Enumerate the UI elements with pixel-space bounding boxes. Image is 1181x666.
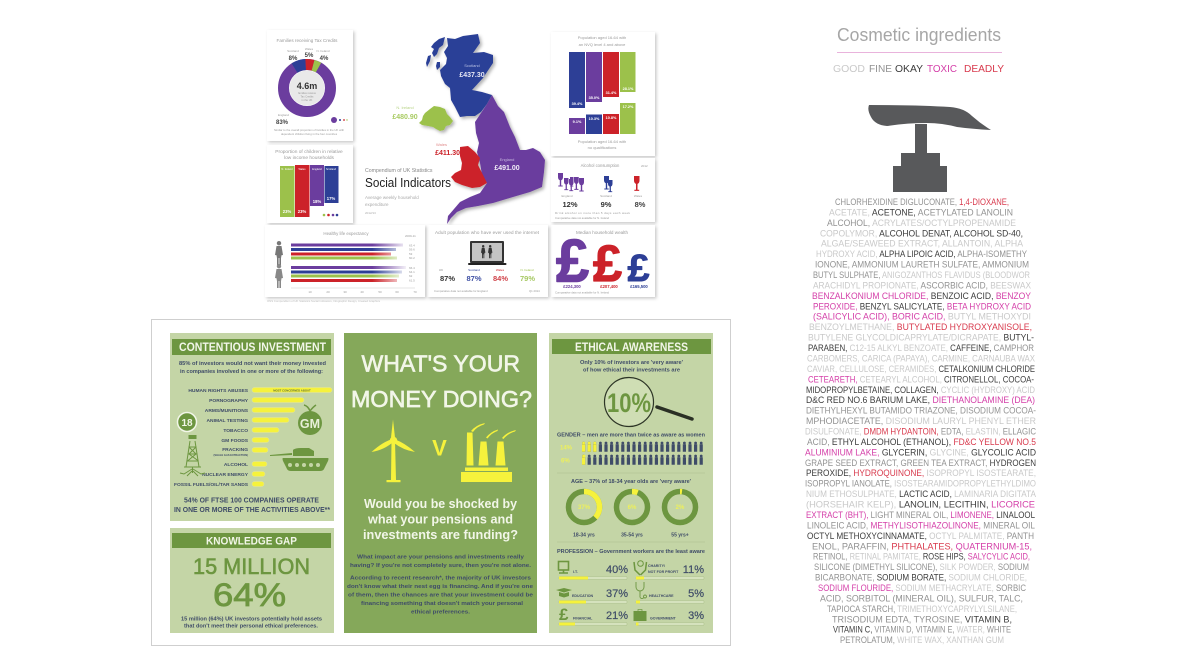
body text: don't know what their nest egg is financing. And if you're one bbox=[347, 584, 534, 590]
text: ingredients bottle: IONONE, AMMONIUM LAURETH SULFATE, AMMONIUM bbox=[815, 259, 1029, 270]
heading: Social Indicators: Compendium of UK Statistics bbox=[365, 168, 433, 174]
bar chart: contentious industries: HUMAN RIGHTS ABUSES bbox=[188, 388, 249, 394]
text: ingredients bottle: ALGAE/SEAWEED EXTRACT, ALLANTOIN, ALPHA bbox=[821, 238, 1024, 249]
icon: tank bbox=[270, 448, 328, 471]
panel: ethical awareness: PROFESSION – Government workers are the least aware bbox=[557, 549, 705, 555]
bar chart: contentious industries: MOST CONCERNED ABOUT bbox=[273, 388, 311, 392]
body text: ethical preferences. bbox=[411, 610, 470, 616]
panel: healthy life expectancy: 70 bbox=[413, 290, 417, 294]
icon: GM apple bbox=[298, 405, 322, 435]
panel: qualifications: Population aged 16-64 with bbox=[578, 139, 626, 144]
panel: alcohol consumption bbox=[551, 158, 655, 222]
text: ingredients bottle: PARABEN, C12-15 ALKYL BENZOATE, CAFFEINE, CAMPHOR bbox=[808, 342, 1034, 353]
panel: median household wealth: Median household wealth bbox=[576, 230, 628, 235]
text: ingredients bottle bbox=[805, 196, 1037, 645]
subheading: what your pensions and bbox=[367, 512, 513, 526]
bar chart: child poverty: Scotland bbox=[326, 167, 337, 171]
icon: purple wine glasses bbox=[558, 173, 584, 192]
panel: knowledge gap: 15 MILLION bbox=[193, 554, 310, 579]
panel: alcohol consumption: Drink alcohol on more than 5 days each week bbox=[555, 211, 630, 215]
panel: healthy life expectancy: 50 bbox=[378, 290, 382, 294]
bar chart: contentious industries: ANIMAL TESTING bbox=[207, 418, 248, 424]
body text: of them, then the chances are that your investment could be bbox=[348, 592, 534, 598]
body text: financing something that doesn't match your personal bbox=[361, 601, 523, 607]
panel: adult internet use: 79% bbox=[520, 274, 535, 283]
text: ingredients bottle: SILICONE (DIMETHYL SILICONE), SILK POWDER, SODIUM bbox=[814, 561, 1029, 572]
panel: adult internet use: UK bbox=[439, 268, 443, 272]
legend: GOOD bbox=[833, 63, 865, 75]
donut charts: age: 18-34 yrs bbox=[573, 532, 595, 538]
panel: adult internet use bbox=[427, 225, 548, 297]
subheading: investments are funding? bbox=[363, 528, 518, 542]
text: ingredients bottle: D&C RED NO.6 BARIUM LAKE, DIETHANOLAMINE (DEA) bbox=[806, 394, 1035, 405]
icon: pound: £ bbox=[559, 605, 569, 624]
panel: healthy life expectancy: 10 bbox=[308, 290, 312, 294]
panel: ethical awareness: ETHICAL AWARENESS bbox=[575, 342, 688, 354]
text: ingredients bottle: NIUM ETHOSULPHATE, LACTIC ACID, LAMINARIA DIGITATA bbox=[806, 488, 1037, 499]
panel: healthy life expectancy: 66.4 bbox=[409, 266, 415, 270]
panel: alcohol consumption: England bbox=[561, 194, 573, 198]
panel: median household wealth: Comparative data not available for N. Ireland bbox=[555, 290, 609, 294]
panel: families receiving tax credits: England bbox=[278, 113, 289, 117]
text: ingredients bottle: OCTYL METHOXYCINNAMATE, OCTYL PALMITATE, PANTH bbox=[807, 530, 1034, 541]
panel: healthy life expectancy: 2009-11 bbox=[405, 234, 416, 238]
bar chart: qualifications: 10.8% bbox=[606, 116, 617, 120]
chart: profession bars: FINANCIAL bbox=[573, 616, 593, 620]
donut chart: in the UK bbox=[302, 98, 313, 102]
versus label: V bbox=[432, 436, 447, 460]
chart: profession bars: GOVERNMENT bbox=[650, 616, 677, 620]
panel: alcohol consumption: Alcohol consumption bbox=[581, 163, 620, 168]
icon: magnifying glass with 10%: 10% bbox=[607, 388, 651, 418]
panel: healthy life expectancy: 62 bbox=[409, 274, 413, 278]
icon: caring hands bbox=[634, 561, 646, 575]
bar chart: qualifications: 9.1% bbox=[573, 120, 582, 124]
icon: laptop with figures bbox=[468, 241, 506, 265]
panel: cosmetic ingredients bbox=[805, 25, 1037, 645]
bar chart: contentious industries: FRACKING bbox=[222, 447, 248, 453]
panel: adult internet use: Wales bbox=[496, 268, 505, 272]
map labels: £437.30 bbox=[459, 72, 485, 79]
map of the UK bbox=[419, 34, 545, 224]
bar chart: qualifications: 10.3% bbox=[589, 117, 600, 121]
legend bbox=[833, 63, 1004, 75]
panel: median household wealth bbox=[551, 225, 655, 297]
bar chart: contentious industries: PORNOGRAPHY bbox=[209, 398, 249, 404]
title: MONEY DOING? bbox=[351, 386, 532, 412]
legend: OKAY bbox=[895, 63, 923, 75]
text: ingredients bottle: LINOLEIC ACID, METHYLISOTHIAZOLINONE, MINERAL OIL bbox=[807, 519, 1035, 530]
panel: adult internet use: 84% bbox=[493, 274, 508, 283]
donut chart: 4.6m bbox=[297, 81, 317, 91]
text: ingredients bottle: DISULFONATE, DMDM HYDANTOIN, EDTA, ELASTIN, ELLAGIC bbox=[805, 426, 1036, 436]
bar chart: contentious industries: (SHALE GAS EXTRACTION) bbox=[214, 453, 248, 457]
panel: families receiving tax credits: Scotland bbox=[287, 49, 299, 53]
icon: graduation cap bbox=[556, 588, 572, 598]
panel: ethical awareness bbox=[549, 333, 713, 633]
text: ingredients bottle: BUTYLENE GLYCOLDICAPRYLATE/DICRAPATE, BUTYL- bbox=[808, 332, 1034, 343]
panel: median household wealth: £165,500 bbox=[630, 284, 648, 289]
bar chart: qualifications: 39.4% bbox=[572, 102, 583, 106]
body text: According to recent research*, the majority of UK investors bbox=[350, 576, 531, 582]
bar chart: contentious industries bbox=[174, 388, 332, 488]
panel: healthy life expectancy bbox=[265, 225, 425, 297]
icon: blue wine glasses bbox=[604, 176, 612, 192]
icon: magnifying glass with 10% bbox=[604, 378, 692, 426]
bar chart: contentious industries: GM FOODS bbox=[221, 438, 249, 444]
bar chart: contentious industries: ARMS/MUNITIONS bbox=[205, 408, 249, 414]
text: ingredients bottle: MPHODIACETATE, DISODIUM LAURYL PHENYL ETHER bbox=[806, 415, 1036, 426]
panel: adult internet use: Adult population who have ever used the internet bbox=[435, 230, 540, 235]
chart: profession bars: 37% bbox=[606, 588, 628, 600]
text: ingredients bottle: DIETHYLHEXYL BUTAMIDO TRIAZONE, DISODIUM COCOA- bbox=[806, 405, 1036, 416]
bar chart: life expectancy bbox=[291, 243, 415, 288]
donut charts: age: 55 yrs+ bbox=[671, 532, 689, 538]
panel: families receiving tax credits: N. Ireland bbox=[316, 49, 330, 53]
map labels: £480.90 bbox=[392, 114, 418, 121]
text: ingredients bottle: VITAMIN C, VITAMIN D, VITAMIN E, WATER, WHITE bbox=[833, 624, 1011, 635]
text: ingredients bottle: BENZOYLMETHANE, BUTYLATED HYDROXYANISOLE, bbox=[809, 321, 1032, 332]
bar chart: qualifications: 35.0% bbox=[589, 96, 600, 100]
bar chart: contentious industries: FOSSIL FUELS/OIL/TAR SANDS bbox=[174, 482, 249, 488]
panel: what's your money doing bbox=[344, 333, 537, 633]
panel: children in relative low income households: Proportion of children in relative bbox=[275, 149, 343, 155]
panel: contentious investment: 85% of investors would not want their money invested bbox=[179, 361, 326, 367]
panel: adult internet use: Comparative data not available for England bbox=[434, 289, 488, 293]
text: ingredients bottle: HYDROXY ACID, ALPHA LIPOIC ACID, ALPHA-ISOMETHY bbox=[816, 248, 1028, 259]
icon: wind turbine bbox=[372, 420, 415, 482]
panel: healthy life expectancy: 40 bbox=[360, 290, 364, 294]
bar chart: contentious industries: NUCLEAR ENERGY bbox=[202, 472, 249, 478]
statistic: FTSE 100: IN ONE OR MORE OF THE ACTIVITIES ABOVE** bbox=[174, 505, 330, 514]
heading: Social Indicators: 2012/13 bbox=[365, 211, 376, 215]
title: WHAT'S YOUR bbox=[362, 350, 520, 376]
chart: profession bars: EDUCATION bbox=[572, 594, 594, 598]
panel: families receiving tax credits: Similar to the overall proportion of families in the UK with bbox=[274, 128, 344, 132]
map labels: £411.30 bbox=[435, 150, 460, 157]
panel: healthy life expectancy: 61.5 bbox=[409, 278, 415, 282]
panel: families receiving tax credits: 5% bbox=[305, 53, 314, 59]
panel: healthy life expectancy: 20 bbox=[326, 290, 330, 294]
panel: families receiving tax credits: 4% bbox=[320, 56, 329, 62]
panel: healthy life expectancy: 30 bbox=[343, 290, 347, 294]
icon: stethoscope bbox=[636, 582, 647, 599]
panel: qualifications: Population aged 16-64 with bbox=[578, 35, 626, 40]
map labels: N. Ireland bbox=[396, 105, 414, 110]
title bbox=[351, 350, 532, 412]
chart: profession bars: 3% bbox=[688, 610, 704, 622]
panel: alcohol consumption: 9% bbox=[601, 200, 612, 209]
chart: profession bars bbox=[559, 564, 704, 626]
legend: TOXIC bbox=[927, 63, 957, 75]
subheading bbox=[363, 497, 518, 542]
icon: bottle pump bbox=[868, 105, 991, 192]
map labels: £491.00 bbox=[494, 165, 520, 172]
donut charts: age: 6% bbox=[628, 505, 637, 511]
bar chart: child poverty bbox=[280, 165, 338, 217]
heading: Social Indicators: expenditure bbox=[365, 202, 389, 207]
text: ingredients bottle: ACID, ETHYL ALCOHOL (ETHANOL), FD&C YELLOW NO.5 bbox=[807, 436, 1036, 447]
pictogram: gender awareness: 6% bbox=[561, 458, 570, 464]
text: ingredients bottle: CHLORHEXIDINE DIGLUCONATE, 1,4-DIOXANE, bbox=[835, 196, 1009, 207]
text: ingredients bottle: GRAPE SEED EXTRACT, GREEN TEA EXTRACT, HYDROGEN bbox=[805, 457, 1036, 468]
panel: families receiving tax credits: Wales bbox=[305, 47, 314, 51]
bar chart: qualifications: 17.2% bbox=[623, 105, 634, 109]
map region: England bbox=[447, 95, 545, 224]
panel: adult internet use: Scotland bbox=[468, 268, 480, 272]
panel: children in relative low income households: low income households bbox=[284, 155, 335, 161]
panel: knowledge gap: 64% bbox=[213, 577, 286, 613]
source note: ONS Compendium of UK Statistics Social Indicators, Infographic Design, Created Graphics bbox=[267, 299, 381, 303]
infographic: UK social indicators bbox=[265, 30, 655, 303]
subheading: Would you be shocked by bbox=[364, 497, 517, 511]
panel: knowledge gap: 15 million (64%) UK investors potentially hold assets bbox=[181, 616, 322, 622]
text: ingredients bottle: CARBOMERS, CARICA (PAPAYA), CARMINE, CARNAUBA WAX bbox=[807, 352, 1036, 364]
map labels bbox=[392, 63, 520, 172]
pictogram: gender awareness bbox=[560, 443, 703, 464]
panel: alcohol consumption: Scotland bbox=[600, 194, 612, 198]
map region: Wales bbox=[451, 146, 487, 188]
chart: profession bars: 40% bbox=[606, 564, 628, 576]
panel: knowledge gap: KNOWLEDGE GAP bbox=[206, 536, 297, 548]
pictogram: gender awareness: 14% bbox=[560, 446, 573, 452]
panel: adult internet use: N. Ireland bbox=[520, 268, 534, 272]
chart: profession bars: 11% bbox=[683, 564, 704, 576]
body text: having? If you're not completely sure, then you're not alone. bbox=[350, 563, 531, 569]
statistic: FTSE 100: 54% OF FTSE 100 COMPANIES OPERATE bbox=[184, 496, 319, 504]
panel: median household wealth: £207,400 bbox=[600, 284, 618, 289]
panel: ethical awareness: of how ethical their investments are bbox=[583, 368, 680, 374]
bar chart: child poverty: 17% bbox=[327, 196, 335, 201]
text: ingredients bottle: BENZALKONIUM CHLORIDE, BENZOIC ACID, BENZOY bbox=[812, 290, 1032, 301]
legend: DEADLY bbox=[964, 63, 1004, 75]
panel: contentious investment bbox=[170, 333, 334, 521]
icon: 18 badge bbox=[178, 412, 196, 432]
chart: profession bars: HEALTHCARE bbox=[649, 594, 674, 598]
bar chart: child poverty: 18% bbox=[313, 199, 321, 204]
text: ingredients bottle: ARACHIDYL PROPIONATE, ASCORBIC ACID, BEESWAX bbox=[813, 279, 1032, 290]
text: ingredients bottle: SODIUM FLOURIDE, SODIUM METHACRYLATE, SORBIC bbox=[818, 582, 1026, 593]
text: ingredients bottle: MIDOPROPYLBETAINE, COLLAGEN, CYCLIC (HYDROXY) ACID bbox=[806, 384, 1035, 395]
panel: healthy life expectancy: 64.1 bbox=[409, 270, 415, 274]
icon: pound signs: £ bbox=[556, 228, 589, 294]
bar chart: child poverty: N. Ireland bbox=[281, 167, 293, 171]
panel: healthy life expectancy: Healthy life expectancy bbox=[323, 231, 369, 236]
panel: adult internet use: 87% bbox=[466, 274, 482, 283]
panel: healthy life expectancy: 60.2 bbox=[409, 256, 415, 260]
text: ingredients bottle: COPOLYMOR, ALCOHOL DENAT, ALCOHOL SD-40, bbox=[820, 227, 1023, 238]
panel: knowledge gap: that don't meet their personal ethical preferences. bbox=[184, 624, 319, 630]
text: ingredients bottle: EXTRACT (BHT), LIGHT MINERAL OIL, LIMONENE, LINALOOL bbox=[806, 509, 1035, 520]
panel: knowledge gap bbox=[170, 528, 334, 633]
bar chart: qualifications: 31.4% bbox=[606, 91, 617, 95]
text: ingredients bottle: PETROLATUM, WHITE WAX, XANTHAN GUM bbox=[840, 634, 1004, 645]
text: ingredients bottle: ENOL, PARAFFIN, PHTHALATES, QUATERNIUM-15, bbox=[812, 540, 1032, 551]
icon: briefcase bbox=[634, 610, 646, 621]
text: ingredients bottle: ISOPROPYL IANOLATE, ISOSTEARAMIDOPROPYLETHYLDIMO bbox=[805, 478, 1036, 489]
body text bbox=[347, 554, 534, 616]
text: ingredients bottle: CAVIAR, CELLULOSE, CERAMIDES, CETALKONIUM CHLORIDE bbox=[807, 363, 1035, 374]
icon: oil derrick bbox=[180, 436, 205, 476]
chart: profession bars: CHARITY/ bbox=[648, 564, 665, 568]
panel: adult internet use: 87% bbox=[440, 274, 455, 283]
map labels: Scotland bbox=[464, 63, 480, 68]
bar chart: qualifications: 28.1% bbox=[623, 87, 634, 91]
text: ingredients bottle: (HORSEHAIR KELP), LANOLIN, LECITHIN, LICORICE bbox=[806, 498, 1035, 510]
panel: alcohol consumption: Wales bbox=[634, 194, 643, 198]
panel: healthy life expectancy: 63.4 bbox=[409, 244, 415, 248]
chart: profession bars: 21% bbox=[606, 610, 628, 622]
panel: contentious investment: CONTENTIOUS INVESTMENT bbox=[179, 340, 327, 354]
bar chart: child poverty: 23% bbox=[298, 209, 306, 214]
text: ingredients bottle: ACID, SORBITOL (MINERAL OIL), SULFUR, TALC, bbox=[820, 592, 1023, 603]
panel: alcohol consumption: 12% bbox=[562, 200, 578, 209]
panel: families receiving tax credits: Families receiving Tax Credits bbox=[277, 38, 338, 43]
panel: alcohol consumption: 2012 bbox=[641, 164, 648, 168]
framed infographic: What's your money doing bbox=[152, 320, 730, 646]
icon: pound signs: £ bbox=[593, 235, 622, 292]
chart: profession bars: I.T. bbox=[573, 570, 578, 574]
text: ingredients bottle: BUTYL SULPHATE, ANIGOZANTHOS FLAVIDUS (BLOODWOR bbox=[813, 269, 1030, 280]
icon: GM apple: GM bbox=[300, 417, 320, 431]
icon: male figure bbox=[275, 241, 283, 265]
bar chart: child poverty: 23% bbox=[283, 209, 291, 214]
donut charts: age: 35-54 yrs bbox=[621, 532, 643, 538]
text: ingredients bottle: BICARBONATE, SODIUM BORATE, SODIUM CHLORIDE, bbox=[815, 572, 1027, 583]
panel: median household wealth: £224,300 bbox=[563, 284, 581, 289]
panel: ethical awareness: AGE – 37% of 18-34 year olds are 'very aware' bbox=[571, 479, 691, 485]
bar chart: contentious industries: TOBACCO bbox=[223, 428, 248, 434]
text: ingredients bottle: RETINOL, RETINAL PAMITATE, ROSE HIPS, SALYCYLIC ACID, bbox=[813, 551, 1030, 562]
panel: contentious investment: in companies involved in one or more of the following: bbox=[180, 369, 323, 375]
icon: red wine glass bbox=[634, 176, 640, 191]
heading: Social Indicators: Social Indicators bbox=[365, 175, 451, 190]
text: ingredients bottle: (SALICYLIC ACID), BORIC ACID, BUTYL METHOXYDI bbox=[813, 311, 1031, 322]
text: ingredients bottle: ALCOHOL, ACRYLATES/OCTYLPROPENAMIDE bbox=[827, 217, 1016, 228]
donut charts: age: 37% bbox=[578, 505, 591, 511]
panel: children in relative low income households bbox=[267, 145, 353, 223]
panel: adult internet use: Q1 2014 bbox=[529, 289, 540, 293]
panel: ethical awareness: Only 10% of investors are 'very aware' bbox=[580, 360, 683, 366]
map region: Northern Ireland bbox=[419, 106, 453, 131]
panel: healthy life expectancy: 60 bbox=[395, 290, 399, 294]
panel: qualifications: no qualifications bbox=[588, 145, 616, 150]
heading: Social Indicators: Average weekly household bbox=[365, 195, 419, 200]
text: ingredients bottle: PEROXIDE, HYDROQUINONE, ISOPROPYL ISOSTEARATE, bbox=[806, 467, 1036, 478]
panel: families receiving tax credits: dependent children living in the four countries bbox=[281, 132, 338, 136]
panel: families receiving tax credits bbox=[267, 30, 353, 141]
icon: female figure bbox=[275, 264, 283, 288]
bar chart: qualifications bbox=[569, 52, 636, 134]
text: ingredients bottle: TRISODIUM EDTA, TYROSINE, VITAMIN B, bbox=[832, 613, 1012, 624]
chart: profession bars: 5% bbox=[688, 588, 704, 600]
chart: profession bars: NOT FOR PROFIT bbox=[648, 570, 679, 574]
map labels: Wales bbox=[436, 142, 447, 147]
icon: pound signs: £ bbox=[628, 248, 650, 290]
panel: qualifications bbox=[551, 32, 655, 156]
text: ingredients bottle: ALUMINIUM LAKE, GLYCERIN, GLYCINE, GLYCOLIC ACID bbox=[805, 446, 1036, 457]
heading: Social Indicators bbox=[365, 168, 451, 215]
panel: qualifications: an NVQ level 4 and above bbox=[579, 42, 626, 47]
donut chart: Tax Credits bbox=[301, 94, 314, 98]
icon: 18 badge: 18 bbox=[181, 418, 193, 429]
legend: FINE bbox=[869, 63, 892, 75]
donut charts: age bbox=[568, 492, 696, 538]
statistic: FTSE 100 bbox=[174, 496, 330, 514]
panel: alcohol consumption: Comparative data not available for N. Ireland bbox=[555, 216, 609, 220]
body text: What impact are your pensions and investments really bbox=[357, 554, 525, 560]
donut charts: age: 2% bbox=[676, 505, 685, 511]
bar chart: child poverty: Wales bbox=[298, 167, 306, 171]
icon: pound signs bbox=[556, 228, 650, 294]
text: ingredients bottle: CETEARETH, CETEARYL ALCOHOL, CITRONELLOL, COCOA- bbox=[808, 373, 1034, 384]
text: ingredients bottle: ACETATE, ACETONE, ACETYLATED LANOLIN bbox=[829, 206, 1013, 217]
icon: factory bbox=[461, 423, 516, 482]
text: ingredients bottle: TAPIOCA STARCH, TRIMETHOXYCAPRYLYLSILANE, bbox=[827, 603, 1017, 614]
icon: computer monitor bbox=[558, 562, 568, 573]
donut chart bbox=[275, 56, 339, 120]
bar chart: contentious industries: ALCOHOL bbox=[224, 462, 248, 468]
panel: healthy life expectancy: 59.6 bbox=[409, 248, 415, 252]
panel: families receiving tax credits: 8% bbox=[289, 56, 298, 62]
panel: ethical awareness: GENDER – men are more than twice as aware as women bbox=[557, 432, 705, 438]
bar chart: child poverty: England bbox=[312, 167, 322, 171]
text: ingredients bottle: PEROXIDE, BENZYL SALICYLATE, BETA HYDROXY ACID bbox=[813, 300, 1031, 311]
map region: Scotland bbox=[426, 34, 493, 117]
panel: families receiving tax credits: 83% bbox=[276, 120, 289, 126]
panel: healthy life expectancy: 53 bbox=[409, 252, 413, 256]
map labels: England bbox=[500, 157, 514, 162]
donut chart: families receive bbox=[298, 91, 316, 95]
title: Cosmetic ingredients bbox=[837, 25, 1001, 45]
panel: alcohol consumption: 8% bbox=[635, 200, 646, 209]
